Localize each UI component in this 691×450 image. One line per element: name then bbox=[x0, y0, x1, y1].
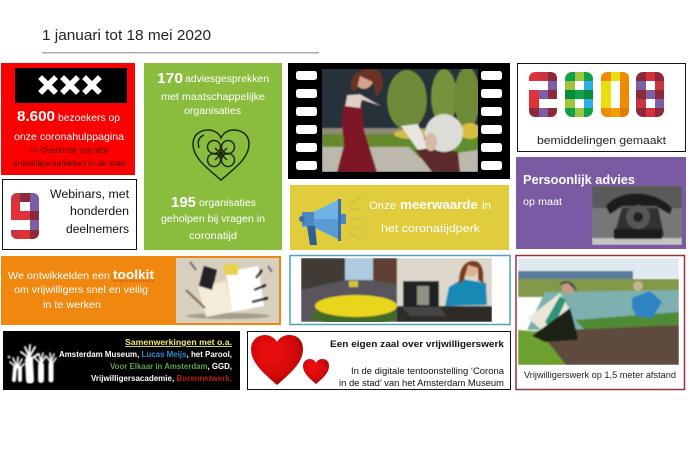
photo: volunteers gardening bbox=[518, 258, 679, 365]
added value text: meerwaarde bbox=[400, 197, 478, 212]
panel: film strip photo bbox=[288, 63, 510, 179]
panel: visitors bbox=[1, 63, 135, 175]
advice text: 170 bbox=[157, 70, 183, 87]
webinars text: deelnemers bbox=[66, 224, 129, 236]
visitors count text: bezoekers op bbox=[58, 112, 120, 124]
own room text: In de digitale tentoonstelling ‘Corona bbox=[351, 366, 504, 376]
advice text: adviesgesprekken bbox=[185, 74, 269, 85]
panel: added value bbox=[290, 185, 509, 250]
toolkit text: We ontwikkelden een bbox=[8, 270, 110, 282]
organisations text: coronatijd bbox=[189, 231, 237, 242]
film holes left bbox=[296, 71, 317, 170]
panel: webinars bbox=[2, 180, 136, 250]
icon: small heart bbox=[303, 359, 329, 384]
panel: street and video call photo bbox=[290, 256, 510, 325]
added value text: Onze bbox=[369, 200, 396, 212]
film holes right bbox=[481, 71, 502, 170]
own room text: in de stad’ van het Amsterdam Museum bbox=[339, 378, 504, 388]
organisations text bbox=[161, 194, 265, 242]
partnerships text bbox=[59, 337, 232, 383]
personal advice subtext: op maat bbox=[523, 197, 562, 208]
toolkit text: om vrijwilligers snel en veilig bbox=[14, 284, 148, 296]
photo: office supplies bbox=[176, 258, 279, 323]
added value text: in bbox=[482, 200, 491, 212]
own room text bbox=[339, 366, 504, 388]
organisations text: geholpen bij vragen in bbox=[161, 214, 265, 225]
own room heading: Een eigen zaal over vrijwilligerswerk bbox=[330, 339, 505, 350]
partnerships text: Vrijwilligersacademie, Burennetwerk. bbox=[91, 373, 232, 383]
mediations text: bemiddelingen gemaakt bbox=[537, 135, 666, 147]
icon: megaphone bbox=[299, 197, 362, 245]
number 2808 bbox=[529, 72, 664, 117]
title: 1 januari tot 18 mei 2020 bbox=[42, 27, 211, 44]
photo: two women greeting bbox=[322, 67, 481, 172]
gardening caption: Vrijwilligerswerk op 1,5 meter afstand bbox=[524, 370, 676, 381]
panel: gardening photo bbox=[516, 256, 684, 390]
webinars text bbox=[50, 189, 130, 236]
webinars text: Webinars, met bbox=[50, 189, 130, 201]
icon: heart with clover bbox=[193, 130, 249, 180]
link text: >> Overzicht van alle bbox=[29, 146, 109, 155]
icon: Amsterdam flag bbox=[15, 68, 127, 103]
photo: tulips and video call bbox=[301, 258, 492, 325]
toolkit text: in te werken bbox=[43, 299, 101, 311]
link text bbox=[13, 146, 125, 168]
icon: large heart bbox=[251, 335, 303, 385]
personal advice heading: Persoonlijk advies bbox=[523, 172, 635, 187]
panel: toolkit bbox=[1, 256, 281, 325]
advice text: organisaties bbox=[184, 106, 241, 117]
partnerships text: Voor Elkaar in Amsterdam, GGD, bbox=[110, 361, 232, 371]
link text: vrijwilligersplekken in de stad bbox=[13, 159, 125, 168]
partnerships text: Samenwerkingen met o.a. bbox=[125, 337, 232, 347]
webinars text: honderden bbox=[70, 206, 129, 218]
toolkit text bbox=[8, 268, 155, 311]
panel: own room bbox=[248, 332, 510, 390]
icon: raised hands bbox=[8, 345, 56, 380]
panel: mediations bbox=[518, 64, 686, 152]
panel: personal advice bbox=[516, 157, 686, 249]
visitors count text: onze coronahulppagina bbox=[14, 131, 124, 143]
organisations text: organisaties bbox=[199, 198, 256, 209]
organisations text: 195 bbox=[171, 194, 196, 211]
added value text bbox=[369, 197, 491, 235]
partnerships text: Amsterdam Museum, Lucas Meijs, het Parool, bbox=[59, 349, 232, 359]
visitors count text: 8.600 bbox=[17, 108, 55, 125]
advice text bbox=[157, 70, 269, 117]
toolkit text: toolkit bbox=[113, 268, 155, 282]
photo: rotary telephone bbox=[592, 186, 682, 245]
icon: number 9 bbox=[11, 193, 39, 239]
visitors count text bbox=[14, 108, 124, 143]
advice text: met maatschappelijke bbox=[161, 92, 265, 103]
panel: partnerships bbox=[3, 331, 240, 390]
added value text: het coronatijdperk bbox=[381, 223, 481, 235]
panel: advice conversations bbox=[144, 63, 282, 250]
